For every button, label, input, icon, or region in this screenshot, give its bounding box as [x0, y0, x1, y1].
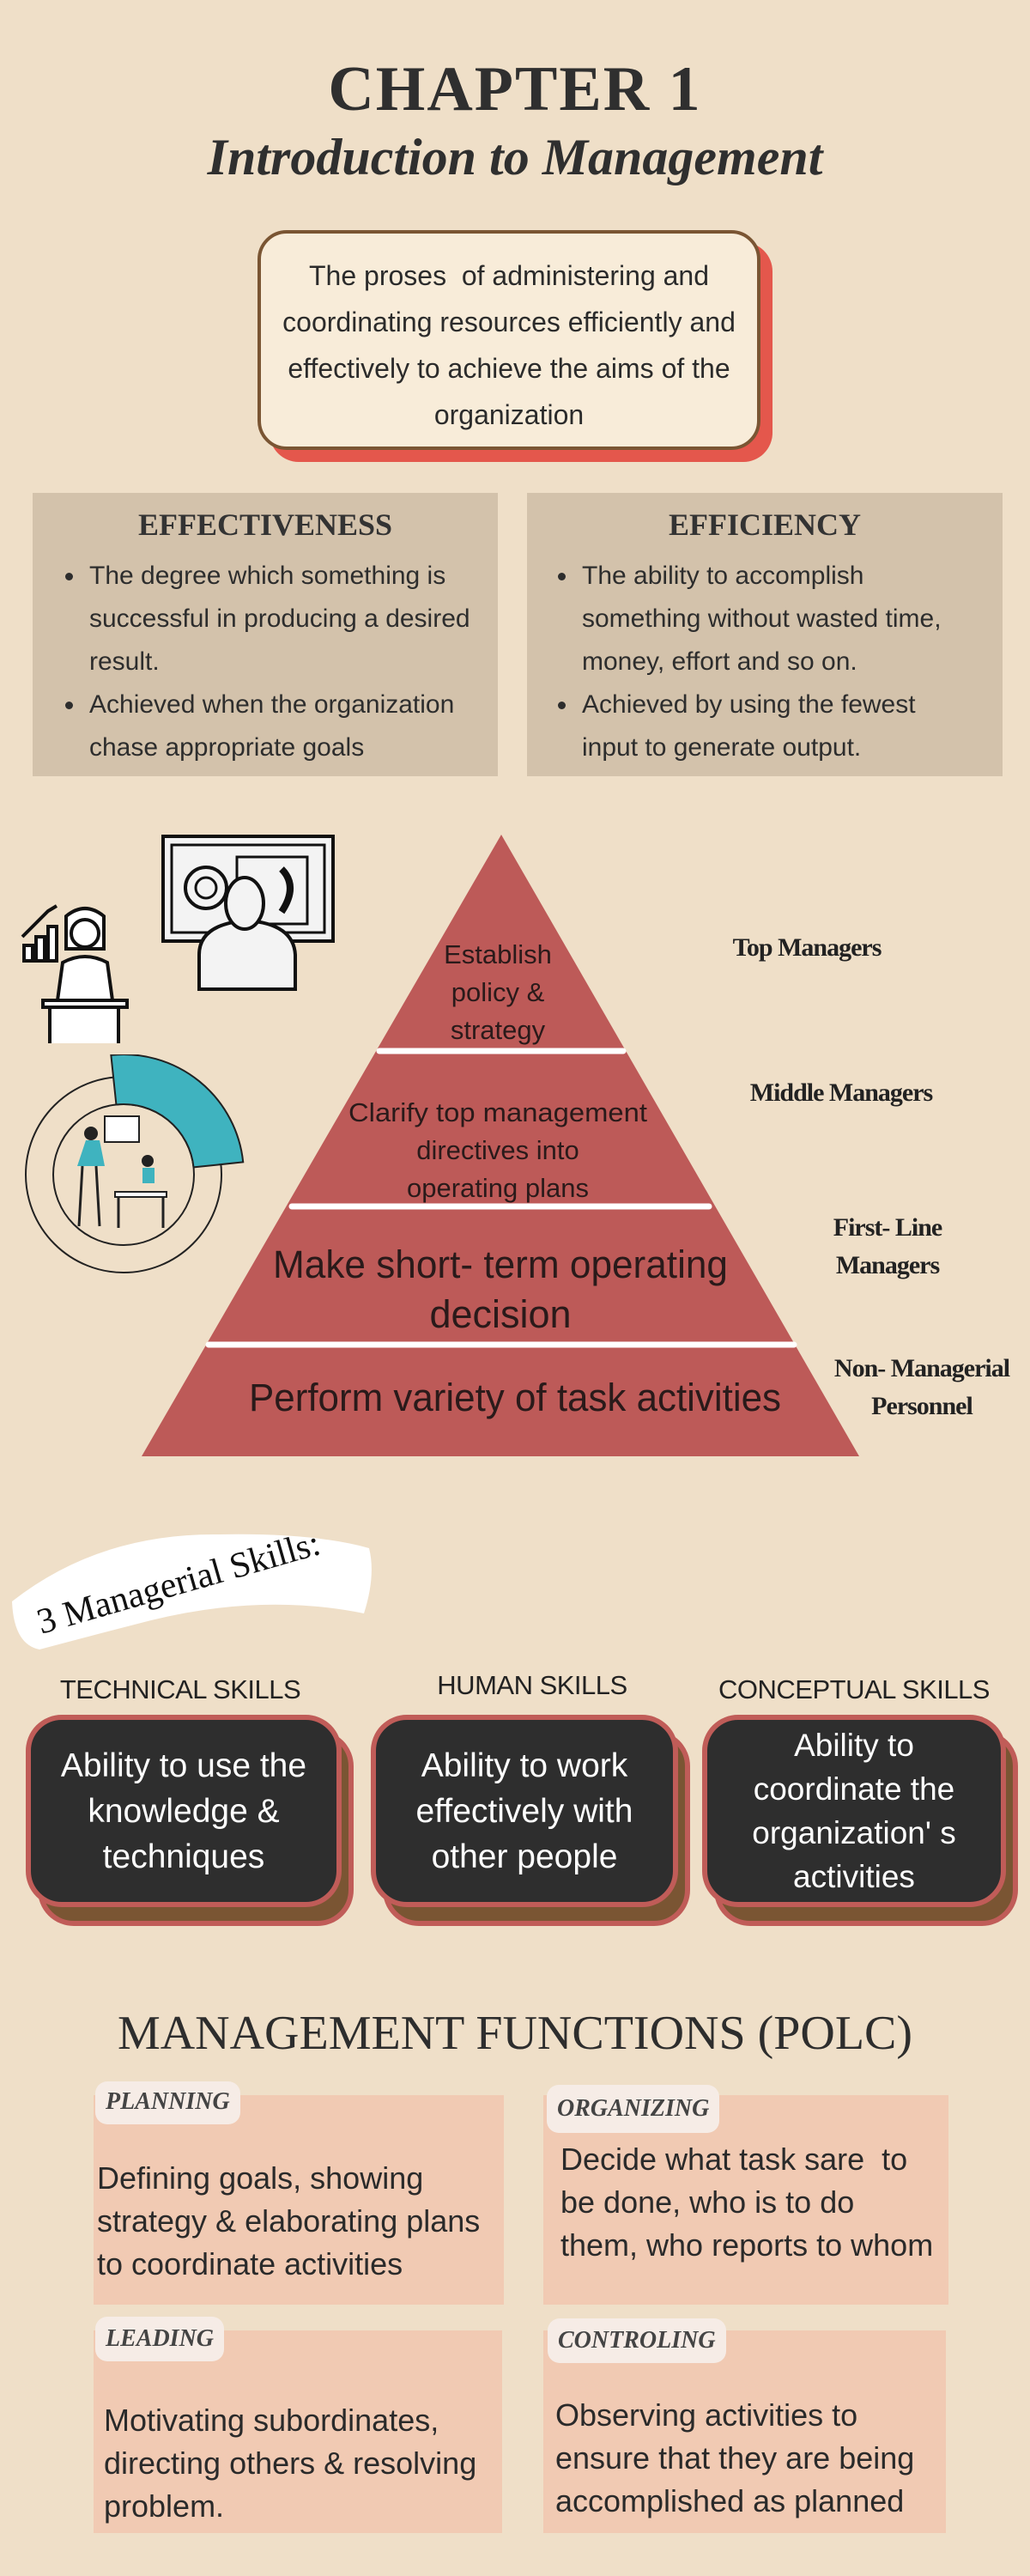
panel: organizing: ORGANIZING: [557, 2095, 709, 2122]
panel: effectiveness: The degree which something is successful in producing a desired result.: [89, 562, 470, 676]
panel: organizing: Decide what task sare to be done, who is to do them, who reports to whom: [560, 2142, 933, 2263]
panel: planning: PLANNING: [106, 2088, 230, 2115]
pyramid: decision: [429, 1292, 572, 1336]
definition box: The proses of administering and coordinating resources efficiently and effectively to achieve the aims of the organization: [282, 260, 736, 430]
panel: leading: LEADING: [106, 2325, 214, 2352]
skill card: conceptual: Ability to coordinate the organization' s activities: [752, 1728, 956, 1894]
panel: controling: Observing activities to ensure that they are being accomplished as planned: [555, 2397, 914, 2518]
panel: effectiveness: EFFECTIVENESS: [138, 507, 392, 542]
definition box: [258, 230, 772, 462]
pyramid: directives into: [416, 1135, 579, 1165]
panel: efficiency: The ability to accomplish something without wasted time, money, effort and so on.: [582, 562, 942, 676]
skill heading: human: HUMAN SKILLS: [437, 1670, 627, 1700]
pyramid: Establish: [444, 939, 552, 969]
pyramid: operating plans: [407, 1173, 589, 1203]
skill card: human: [371, 1715, 690, 1926]
title: CHAPTER 1: [328, 54, 702, 125]
label: first-line managers: Managers: [836, 1251, 939, 1279]
panel: efficiency: [527, 493, 1003, 776]
icon: presenter at podium: [21, 904, 129, 1043]
label: top managers: Top Managers: [733, 933, 881, 962]
pyramid: [142, 835, 859, 1456]
label: first-line managers: [833, 1213, 942, 1279]
panel: controling: [543, 2330, 946, 2533]
heading: 3 managerial skills: 3 Managerial Skills:: [33, 1524, 324, 1643]
icon: person at whiteboard: [161, 835, 335, 991]
skill heading: technical: TECHNICAL SKILLS: [60, 1674, 300, 1704]
skill card: human: Ability to work effectively with other people: [416, 1747, 633, 1875]
icon: team meeting circle: [25, 1054, 244, 1273]
label: non-managerial personnel: Non- Managerial: [834, 1354, 1009, 1382]
label: first-line managers: First- Line: [833, 1213, 942, 1242]
panel: planning: Defining goals, showing strategy & elaborating plans to coordinate activities: [97, 2160, 480, 2281]
panel: leading: [94, 2330, 502, 2533]
pyramid: Make short- term operating: [273, 1242, 728, 1286]
label: middle managers: Middle Managers: [750, 1078, 932, 1107]
pyramid: Perform variety of task activities: [249, 1376, 781, 1419]
label: non-managerial personnel: Personnel: [871, 1392, 972, 1420]
panel: controling: CONTROLING: [558, 2327, 716, 2354]
panel: efficiency: Achieved by using the fewest input to generate output.: [582, 690, 916, 762]
skill heading: conceptual: CONCEPTUAL SKILLS: [718, 1674, 990, 1704]
pyramid: Clarify top management: [348, 1097, 647, 1127]
title: [207, 54, 824, 185]
title: Introduction to Management: [208, 129, 822, 185]
skill card: conceptual: [702, 1715, 1018, 1926]
panel: efficiency: EFFICIENCY: [669, 507, 861, 542]
heading: management functions: MANAGEMENT FUNCTIONS (POLC): [118, 2007, 912, 2060]
pyramid: strategy: [451, 1015, 546, 1045]
panel: planning: [94, 2095, 504, 2305]
label: non-managerial personnel: [834, 1354, 1010, 1420]
skill card: technical: Ability to use the knowledge & techniques: [61, 1747, 306, 1875]
skill card: technical: [26, 1715, 354, 1926]
panel: organizing: [543, 2095, 948, 2305]
panel: effectiveness: Achieved when the organization chase appropriate goals: [89, 690, 454, 762]
panel: effectiveness: [33, 493, 498, 776]
pyramid: policy &: [451, 977, 545, 1007]
panel: leading: Motivating subordinates, directing others & resolving problem.: [104, 2403, 476, 2524]
